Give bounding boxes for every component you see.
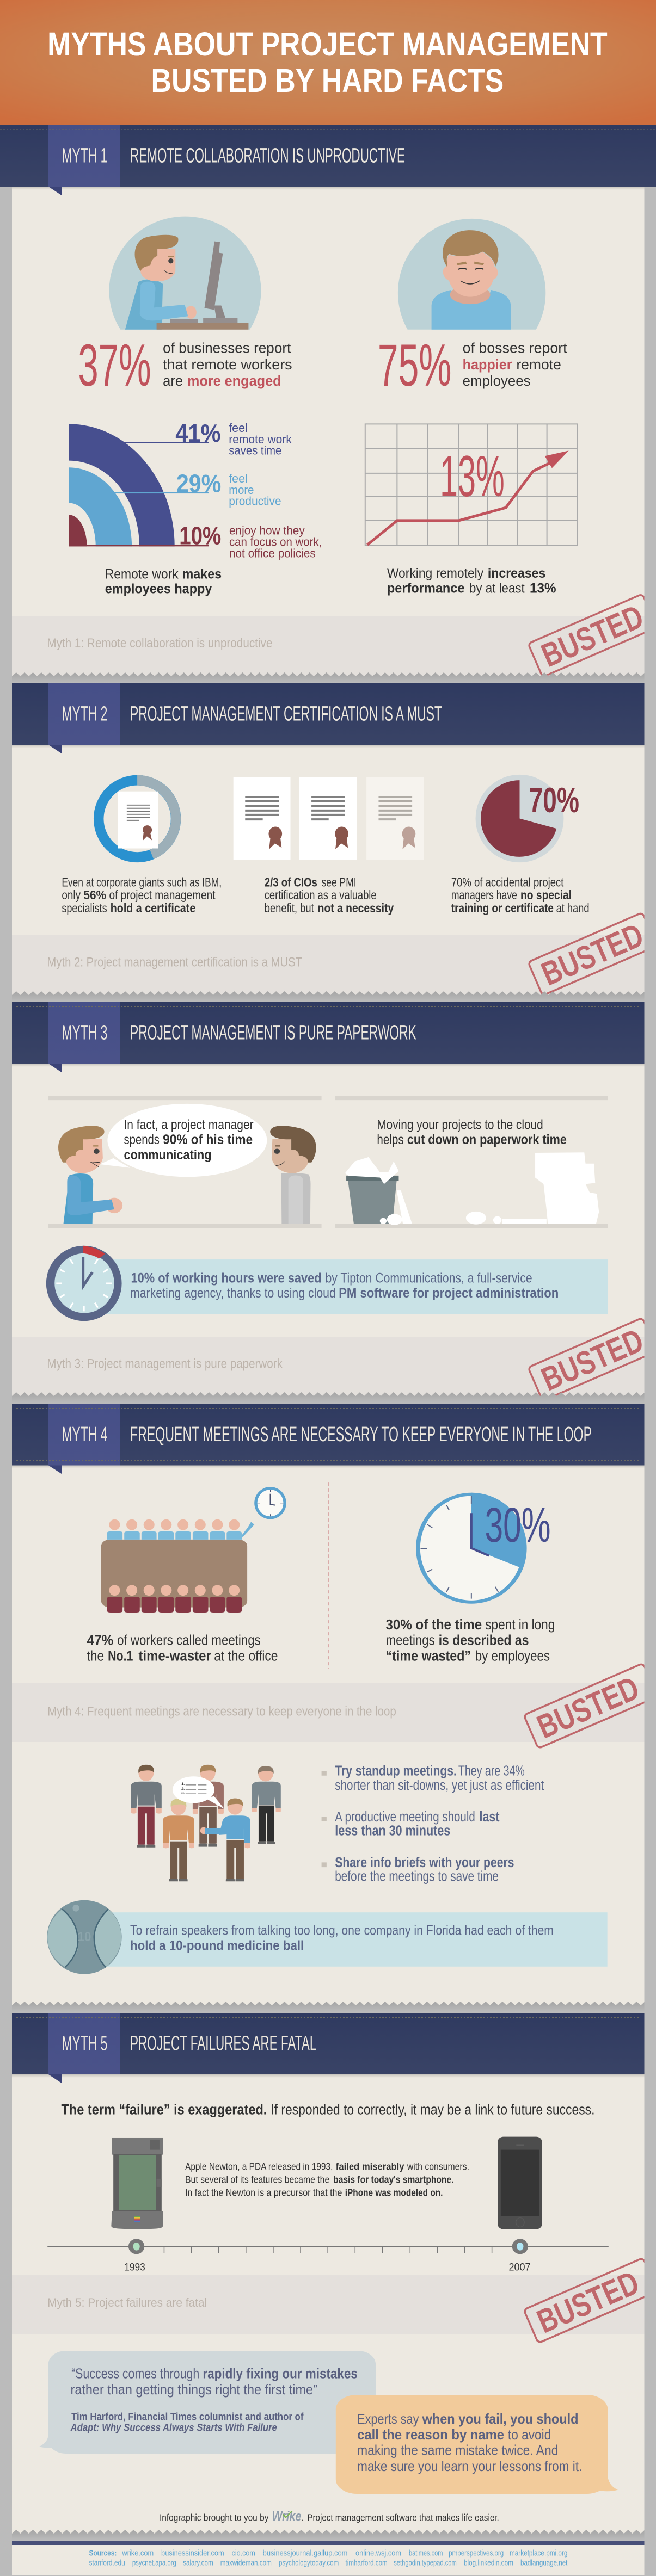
text: IBM certificate fact	[62, 875, 222, 915]
paper shadow	[12, 2074, 645, 2078]
sources line 2: stanford.edu	[89, 2558, 125, 2567]
panel: myth 5: rapidly fixing our mistakes	[203, 2365, 358, 2381]
caption: remote work makes employees happy	[105, 567, 222, 596]
callout: speech bubble: communicating	[124, 1148, 212, 1163]
icon: medicine ball	[47, 1900, 122, 1974]
panel: myth 3: Myth 3: Project management is pure paperwork	[47, 1356, 283, 1371]
text: 47% of workers: 47%	[87, 1632, 113, 1648]
person: back centre	[193, 1765, 224, 1847]
illustration: paperwork and cloud: helps	[377, 1133, 404, 1147]
callout: agenda bubble	[173, 1776, 224, 1809]
stat: 75% of bosses: happier	[463, 356, 512, 373]
panel: myth 2: Myth 2: Project management certification is a MUST	[47, 955, 302, 969]
caption: working remotely: by at least	[469, 581, 525, 596]
illustration: two people talking	[48, 1096, 322, 1228]
recap strip	[12, 2275, 645, 2334]
callout: medicine ball: hold a 10-pound medicine ball	[130, 1938, 304, 1953]
illustration: Apple Newton	[111, 2138, 163, 2229]
text: IBM certificate fact: 56%	[83, 888, 106, 902]
illustration: happy boss	[398, 219, 545, 330]
sources line 2: timharford.com	[346, 2558, 388, 2567]
panel: myth 4: of workers called meetings	[117, 1632, 261, 1648]
paper background	[12, 2074, 645, 2534]
stat: 37% of businesses: more engaged	[187, 373, 281, 389]
illustration: two people talking: In fact, a project manager	[124, 1117, 254, 1132]
chart: 56% certificate donut	[94, 775, 181, 862]
panel: myth 5: iPhone was modeled on.	[345, 2186, 443, 2198]
stat: 37% of businesses: of businesses report	[163, 340, 291, 356]
icon: wall clock	[254, 1487, 286, 1519]
chart: remote work arcs: 10%	[179, 522, 221, 550]
paper background	[12, 1465, 645, 2005]
panel: myth 1: makes	[182, 567, 222, 582]
recap strip	[12, 616, 645, 676]
person: back left	[131, 1765, 162, 1848]
panel: myth 2: certification as a valuable	[265, 888, 377, 902]
sources line 2: maxwideman.com	[220, 2558, 272, 2567]
panel: myth 4: They are 34%	[458, 1763, 525, 1779]
myth 2 banner	[12, 683, 645, 753]
sources line 1: online.wsj.com	[355, 2548, 401, 2558]
sources line 1	[89, 2548, 567, 2558]
chart: remote work arcs: enjoy how they	[229, 524, 305, 538]
text: IBM certificate fact: only	[62, 888, 81, 902]
stat: 37% of businesses: 37%	[78, 332, 151, 398]
callout: experts say: to avoid	[508, 2426, 551, 2443]
callout: Tim Harford quote: “Success comes through	[71, 2365, 199, 2381]
callout: 10% of working hours: 10% of working hours were saved	[131, 1271, 322, 1286]
paper background	[12, 187, 645, 676]
text: 30% of the time: 30% of the time	[386, 1616, 482, 1633]
panel: myth 2: at hand	[556, 901, 589, 915]
text: 47% of workers: No.1	[108, 1648, 133, 1664]
credit line: .	[302, 2512, 304, 2523]
sources line 2: psycnet.apa.org	[132, 2558, 176, 2567]
icon: medicine ball: 10	[78, 1929, 91, 1944]
timeline: 1993	[124, 2261, 145, 2273]
text: CIOs fact: see PMI	[322, 875, 357, 889]
recap strip	[12, 1683, 645, 1742]
text: Newton story: failed miserably	[336, 2160, 404, 2172]
text: failure is exaggerated: The term “failure” is exaggerated.	[62, 2102, 267, 2118]
callout: agenda bubble: 1.	[181, 1782, 185, 1786]
panel: myth 5: Myth 5: Project failures are fatal	[47, 2296, 207, 2309]
chart: remote work arcs	[69, 419, 322, 560]
text: 47% of workers: the	[87, 1648, 104, 1664]
panel: myth 1	[0, 125, 656, 677]
chart: remote work arcs: not office policies	[229, 547, 316, 560]
sources line 1: wrike.com	[122, 2548, 154, 2558]
callout: experts say	[336, 2395, 618, 2494]
callout: speech bubble: 90% of his time	[163, 1133, 253, 1147]
panel: myth 1: 13%	[530, 581, 556, 596]
text: 30% of the time: meetings	[386, 1632, 435, 1648]
paper shadow	[12, 187, 645, 190]
text: accidental managers fact: no special	[520, 888, 572, 902]
chart: remote work arcs: 29%	[176, 470, 221, 498]
panel: myth 4	[12, 1404, 656, 2005]
sources line 1: pmperspectives.org	[449, 2548, 504, 2558]
sources line 2: sethgodin.typepad.com	[394, 2558, 457, 2567]
sources line 2: salary.com	[183, 2558, 213, 2567]
text: accidental managers fact: managers have	[451, 888, 517, 902]
callout: experts say: Experts say	[357, 2411, 419, 2427]
list: meeting tips: last	[479, 1808, 499, 1825]
chart: 13% line graph	[365, 424, 578, 546]
chart: remote work arcs: saves time	[229, 444, 281, 458]
list: meeting tips: less than 30 minutes	[335, 1823, 450, 1838]
panel: myth 5	[12, 2013, 656, 2534]
person: front left	[163, 1799, 194, 1881]
chart: remote work arcs: more	[229, 483, 254, 497]
chart: remote work arcs: feel	[229, 422, 248, 435]
callout: 10% of working hours	[46, 1246, 608, 1321]
sources line 1: businessinsider.com	[161, 2548, 224, 2558]
myth 3 banner	[12, 1002, 645, 1072]
stat: 75% of bosses: 75%	[378, 332, 452, 398]
callout: agenda bubble: 3.	[181, 1792, 185, 1795]
text: 47% of workers	[87, 1632, 278, 1664]
text: accidental managers fact	[451, 875, 589, 915]
panel: myth 2	[12, 683, 656, 996]
callout: Tim Harford quote: Adapt: Why Success Always Starts With Failure	[70, 2422, 277, 2433]
chart: 30% clock	[416, 1493, 551, 1604]
myth 5 banner	[12, 2013, 645, 2083]
stat: 75% of bosses: remote	[516, 356, 561, 373]
caption: working remotely: Working remotely	[387, 566, 483, 581]
caption: remote work makes employees happy: employees happy	[105, 582, 212, 596]
paper background	[12, 745, 645, 995]
logo: Wrike	[272, 2509, 302, 2524]
illustration: remote worker at computer	[109, 217, 261, 330]
chart: 70% pie	[476, 775, 579, 862]
divider: dashed vertical	[328, 1482, 329, 1669]
paper background	[12, 1064, 645, 1396]
callout: 10% of working hours: marketing agency, thanks to using cloud	[130, 1286, 336, 1301]
callout: Tim Harford quote	[39, 2351, 376, 2454]
icon: clock	[46, 1246, 122, 1321]
chart: remote work arcs: 41%	[175, 419, 221, 447]
panel: myth 4: by employees	[475, 1648, 550, 1664]
caption: working remotely: increases	[488, 566, 545, 581]
myth 1 banner	[0, 125, 656, 195]
list: meeting tips: Try standup meetings.	[335, 1763, 457, 1779]
callout: speech bubble	[90, 1104, 267, 1177]
callout: medicine ball	[47, 1900, 608, 1974]
text: Newton story	[185, 2160, 469, 2198]
text: Newton story: In fact the Newton is a precursor that the	[185, 2186, 342, 2198]
stat: 37% of businesses: are	[163, 373, 183, 389]
sources line 2: psychologytoday.com	[279, 2558, 339, 2567]
paper shadow	[12, 1064, 645, 1067]
panel: myth 4: at the office	[214, 1648, 278, 1664]
text: CIOs fact	[265, 875, 394, 915]
text: Newton story: Apple Newton, a PDA released in 1993,	[185, 2160, 333, 2172]
text: IBM certificate fact: hold a certificate	[111, 901, 195, 915]
stat: 75% of bosses: employees	[463, 373, 531, 389]
sources line 1: cio.com	[232, 2548, 255, 2558]
panel: myth 3	[12, 1002, 656, 1401]
myth 3 banner: MYTH 3	[62, 1021, 107, 1044]
text: 30% of the time	[386, 1616, 555, 1664]
header banner with title	[0, 0, 656, 125]
sources line 2: blog.linkedin.com	[464, 2558, 513, 2567]
recap strip	[12, 935, 645, 995]
sources line 1: batimes.com	[409, 2548, 443, 2558]
timeline	[47, 2239, 609, 2273]
illustration: meeting table	[101, 1487, 286, 1613]
callout: speech bubble: spends	[124, 1133, 160, 1147]
caption: working remotely: performance	[387, 581, 464, 596]
icon: three certificates	[234, 777, 424, 860]
text: 47% of workers: time-waster	[138, 1648, 211, 1664]
list: meeting tips	[322, 1763, 544, 1884]
text: CIOs fact: benefit, but	[265, 901, 314, 915]
chart: remote work arcs: productive	[229, 495, 281, 508]
caption: remote work makes employees happy: Remote work	[105, 567, 179, 582]
text: CIOs fact: 2/3 of CIOs	[265, 875, 317, 889]
paper shadow	[12, 1465, 645, 1468]
recap strip	[12, 1337, 645, 1396]
sources line 1: businessjournal.gallup.com	[263, 2548, 347, 2558]
panel: myth 1: can focus on work,	[229, 535, 322, 549]
chart: remote work arcs: feel	[229, 472, 248, 485]
stat: 37% of businesses: that remote workers	[163, 356, 292, 373]
person: back right	[252, 1766, 281, 1844]
timeline: 2007	[508, 2261, 531, 2273]
sources line 1: Sources:	[89, 2548, 117, 2558]
text: Newton story: But several of its features became the	[185, 2173, 329, 2185]
panel: myth 5: with consumers.	[407, 2160, 469, 2172]
caption: working remotely	[387, 566, 556, 596]
credit line: Wrike	[272, 2509, 302, 2524]
stat: 75% of bosses: of bosses report	[463, 340, 567, 356]
illustration: paperwork and cloud	[335, 1096, 608, 1228]
panel: myth 2: Even at corporate giants such as IBM,	[62, 875, 222, 889]
text: 30% of the time: is described as	[439, 1632, 529, 1648]
paper shadow	[12, 745, 645, 748]
panel: myth 2: not a necessity	[318, 901, 394, 915]
myth 2 banner: MYTH 2	[62, 702, 107, 725]
myth 4 banner	[12, 1404, 645, 1474]
illustration: iPhone	[498, 2137, 542, 2229]
illustrations row	[109, 217, 545, 330]
panel: myth 1: Myth 1: Remote collaboration is unproductive	[47, 636, 272, 650]
text: IBM certificate fact: specialists	[62, 901, 107, 915]
myth 5 banner: MYTH 5	[62, 2032, 107, 2055]
panel: sources footer: badlanguage.net	[520, 2558, 568, 2567]
panel: sources footer	[12, 2541, 645, 2575]
illustration: standup meeting group	[131, 1765, 281, 1881]
callout: agenda bubble: 2.	[181, 1787, 185, 1791]
myth 1 banner: MYTH 1	[62, 144, 107, 167]
myth 4 banner: MYTH 4	[62, 1422, 107, 1445]
text: 30% of the time: “time wasted”	[386, 1648, 471, 1664]
credit line	[160, 2509, 499, 2524]
panel: myth 2: of project management	[109, 888, 216, 902]
sources line 2	[89, 2558, 568, 2567]
person: front right	[200, 1799, 250, 1881]
panel: myth 4: spent in long	[485, 1616, 555, 1633]
chart: remote work arcs: remote work	[229, 433, 292, 446]
panel: myth 5: basis for today's smartphone.	[333, 2173, 453, 2185]
credit line: Infographic brought to you by	[160, 2512, 269, 2523]
